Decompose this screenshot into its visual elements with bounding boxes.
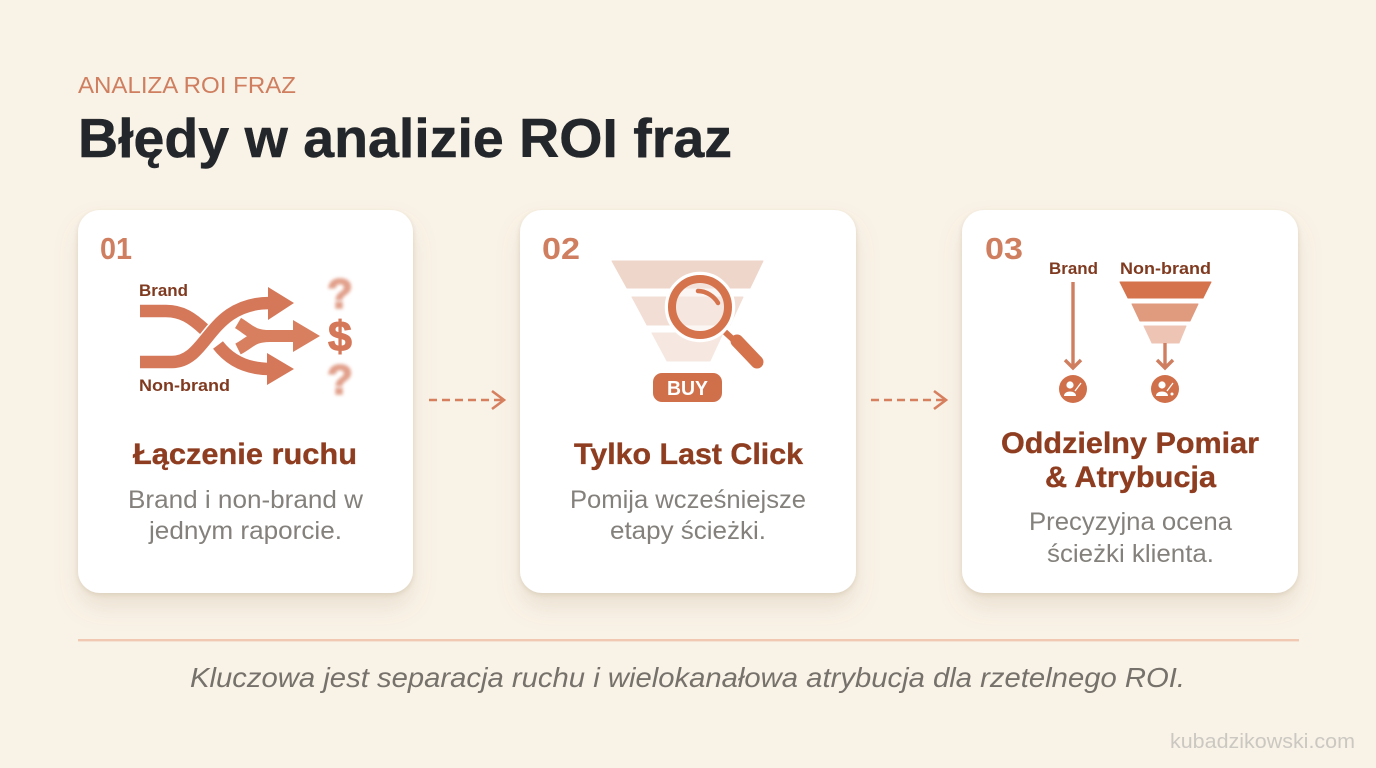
number 02: 02 <box>542 231 580 266</box>
icon: funnel with magnifier <box>612 261 763 402</box>
number 03: 03 <box>985 231 1023 266</box>
icon: blurred question marks: ? <box>327 270 353 317</box>
panel: card 01 <box>78 210 413 593</box>
heading <box>1001 427 1260 494</box>
badge: BUY: BUY <box>667 378 709 400</box>
number 01: 01 <box>100 231 132 266</box>
kicker: ANALIZA ROI FRAZ <box>78 72 296 98</box>
heading: Oddzielny Pomiar <box>1001 427 1260 460</box>
heading: & Atrybucja <box>1045 461 1217 494</box>
label: Brand: Brand <box>139 282 188 300</box>
icon: blurred question marks <box>327 270 353 403</box>
panel: card 02 <box>520 210 856 593</box>
watermark: kubadzikowski.com <box>1170 731 1355 753</box>
arrow 1 to 2 <box>429 391 504 409</box>
title: Błędy w analizie ROI fraz <box>78 107 732 169</box>
heading: Łączenie ruchu <box>133 438 357 471</box>
icon: crossing traffic streams <box>139 270 353 403</box>
description <box>1029 508 1232 568</box>
description: Pomija wcześniejsze <box>570 486 806 514</box>
heading: Tylko Last Click <box>574 438 804 471</box>
panel: card 03 <box>962 210 1298 593</box>
arrow 2 to 3 <box>871 391 946 409</box>
description: Brand i non-brand w <box>128 486 364 514</box>
takeaway: Kluczowa jest separacja ruchu i wielokanałowa atrybucja dla rzetelnego ROI. <box>190 662 1185 693</box>
label: Non-brand: Non-brand <box>139 377 230 395</box>
description: Precyzyjna ocena <box>1029 508 1232 536</box>
description <box>570 486 806 545</box>
description <box>128 486 364 545</box>
label: Brand: Brand <box>1049 260 1098 278</box>
icon: blurred question marks: ? <box>327 356 353 403</box>
description: etapy ścieżki. <box>610 517 766 545</box>
label: Non-brand: Non-brand <box>1120 260 1211 278</box>
icon: dollar: $ <box>328 313 352 361</box>
description: ścieżki klienta. <box>1047 540 1214 568</box>
badge: BUY <box>653 373 722 402</box>
icon: separate brand and non-brand paths <box>1049 260 1211 403</box>
description: jednym raporcie. <box>148 517 342 545</box>
